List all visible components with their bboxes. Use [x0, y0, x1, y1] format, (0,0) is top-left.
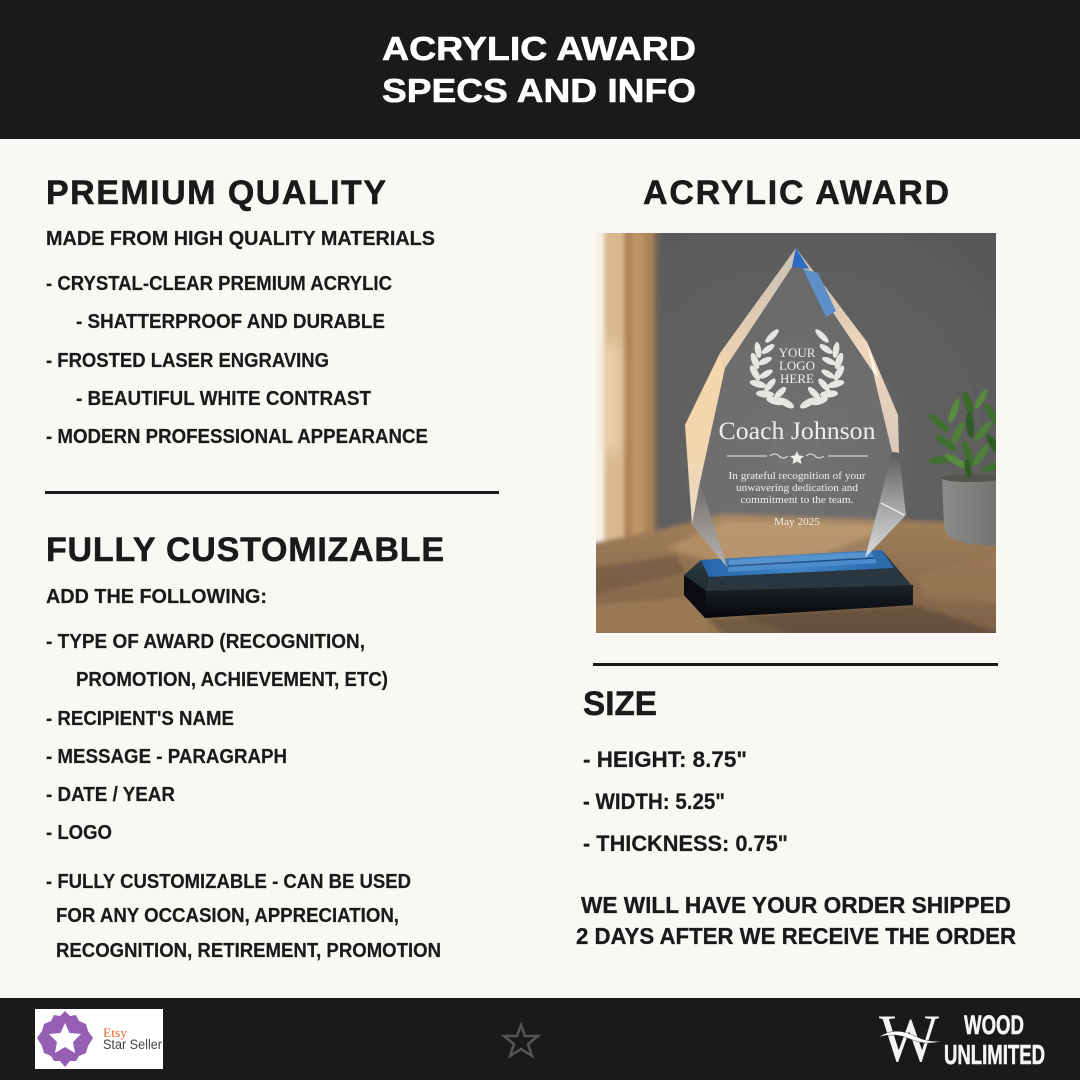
text block: quality list: - CRYSTAL-CLEAR PREMIUM ACRYLIC [46, 273, 392, 295]
heading: fully customizable: FULLY CUSTOMIZABLE [46, 531, 444, 569]
text block: dimensions: - THICKNESS: 0.75" [583, 831, 788, 856]
logo: wood unlimited: W [879, 1000, 940, 1076]
text block: customization list: - LOGO [46, 822, 112, 844]
heading: size: SIZE [583, 685, 657, 723]
heading: acrylic award: ACRYLIC AWARD [643, 174, 949, 212]
engraving: award text: unwavering dedication and [736, 482, 858, 494]
icon: etsy star seller badge [35, 1009, 163, 1069]
text block: customization list: PROMOTION, ACHIEVEMENT, ETC) [76, 669, 388, 691]
engraving: award text: Coach Johnson [718, 416, 876, 445]
product photo: acrylic award on a table [591, 228, 1004, 638]
engraving: award text: HERE [780, 371, 814, 386]
text block: customization list [46, 586, 441, 962]
text block: shipping note [576, 892, 1016, 949]
panel: size [583, 685, 788, 856]
engraving: award text: commitment to the team. [740, 494, 854, 506]
engraving: award text: YOUR [779, 345, 816, 360]
text block: customization list: RECOGNITION, RETIREMENT, PROMOTION [56, 940, 441, 962]
text block: customization list: - FULLY CUSTOMIZABLE - CAN BE USED [46, 871, 411, 893]
text block: customization list: FOR ANY OCCASION, APPRECIATION, [56, 905, 399, 927]
header band [0, 0, 1080, 139]
text block: customization list: - MESSAGE - PARAGRAPH [46, 746, 287, 768]
engraving: award text [718, 345, 876, 528]
text block: shipping note: WE WILL HAVE YOUR ORDER SHIPPED [581, 892, 1011, 918]
text block: shipping note: 2 DAYS AFTER WE RECEIVE THE ORDER [576, 923, 1016, 949]
text block: customization list: - TYPE OF AWARD (RECOGNITION, [46, 631, 365, 653]
text block: dimensions [583, 747, 788, 856]
panel: premium quality [46, 174, 435, 448]
text block: customization list: - DATE / YEAR [46, 784, 176, 806]
title: ACRYLIC AWARD [382, 30, 696, 67]
footer band [0, 998, 1080, 1080]
text block: quality list: - FROSTED LASER ENGRAVING [46, 350, 329, 372]
logo: wood unlimited [879, 1000, 1045, 1076]
sunlight glow on curtain [602, 343, 618, 453]
text block: quality list: - SHATTERPROOF AND DURABLE [76, 311, 385, 333]
engraving: award text: In grateful recognition of your [728, 470, 866, 482]
text block: quality list: MADE FROM HIGH QUALITY MATERIALS [46, 228, 435, 250]
text block: dimensions: - HEIGHT: 8.75" [583, 747, 747, 772]
potted plant [928, 389, 996, 546]
text block: quality list: - MODERN PROFESSIONAL APPEARANCE [46, 426, 428, 448]
engraving: award text: LOGO [779, 358, 815, 373]
heading: premium quality: PREMIUM QUALITY [46, 174, 386, 212]
title: SPECS AND INFO [382, 72, 696, 109]
text block: customization list: ADD THE FOLLOWING: [46, 586, 267, 608]
icon: etsy star seller badge: Etsy [103, 1025, 128, 1040]
text block: quality list: - BEAUTIFUL WHITE CONTRAST [76, 388, 371, 410]
icon: etsy star seller badge: Star Seller [103, 1037, 162, 1052]
engraving: laurel logo [748, 328, 846, 411]
award base [684, 550, 913, 618]
text block: quality list [46, 228, 435, 448]
title [382, 30, 696, 109]
text block: customization list: - RECIPIENT'S NAME [46, 708, 234, 730]
engraving: award text: May 2025 [774, 516, 821, 528]
logo: wood unlimited: WOOD [964, 1010, 1024, 1040]
acrylic body [685, 248, 906, 567]
photo backdrop [591, 228, 1001, 638]
panel: fully customizable [46, 531, 444, 962]
text block: dimensions: - WIDTH: 5.25" [583, 789, 725, 814]
icon: star outline [504, 1025, 538, 1056]
